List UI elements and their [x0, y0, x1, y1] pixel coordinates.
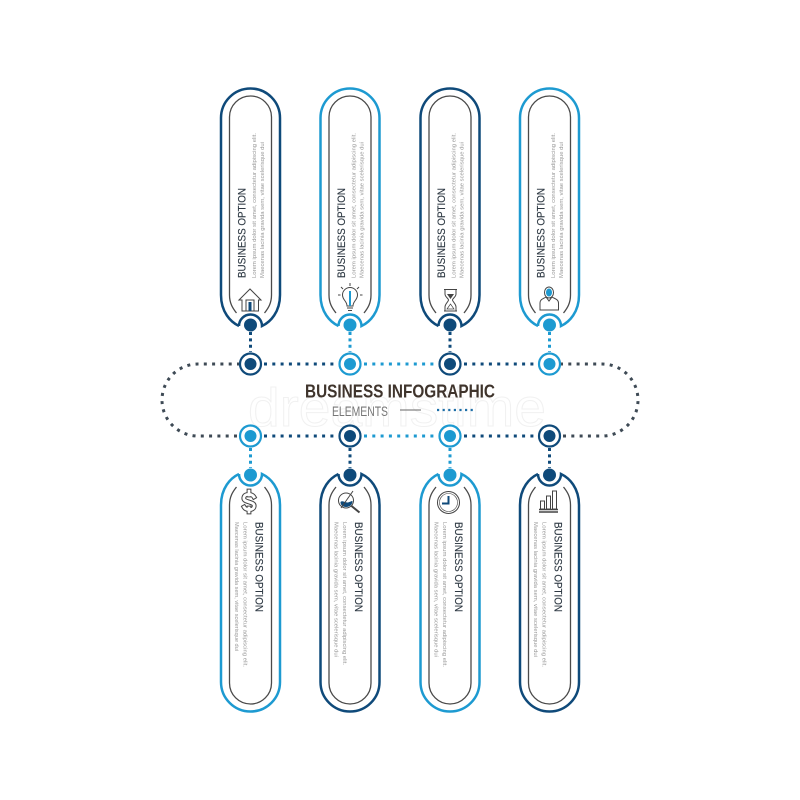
panel: top option 2: Maecenas lacinia gravida sem, vitae scelerisque dui — [360, 142, 366, 278]
panel: bottom option 2 — [320, 426, 380, 712]
dotted stadium connector — [162, 364, 638, 436]
panel: top option 3: BUSINESS OPTION — [436, 188, 448, 278]
panel: bottom option 2: BUSINESS OPTION — [352, 522, 364, 612]
panel: bottom option 3: BUSINESS OPTION — [452, 522, 464, 612]
title: BUSINESS INFOGRAPHIC — [305, 380, 495, 402]
icon: person — [540, 287, 558, 310]
panel: bottom option 1: Maecenas lacinia gravida sem, vitae scelerisque dui — [233, 522, 239, 651]
panel: bottom option 2: Lorem ipsum dolor sit amet, consectetur adipiscing elit. — [341, 522, 347, 665]
panel: top option 1: Maecenas lacinia gravida sem, vitae scelerisque dui — [260, 142, 266, 278]
panel: bottom option 3: Lorem ipsum dolor sit amet, consectetur adipiscing elit. — [441, 522, 447, 667]
subtitle rule — [400, 409, 421, 411]
icon: hourglass — [444, 290, 457, 311]
panel: top option 4 — [520, 88, 579, 374]
panel: bottom option 1: BUSINESS OPTION — [252, 522, 264, 612]
icon: bar chart — [539, 491, 558, 512]
panel: top option 4: BUSINESS OPTION — [536, 188, 548, 278]
panel: bottom option 4: BUSINESS OPTION — [552, 522, 564, 612]
subtitle dotted rule — [437, 409, 476, 411]
panel: top option 2: BUSINESS OPTION — [336, 188, 348, 278]
panel: bottom option 1: Lorem ipsum dolor sit amet, consectetur adipiscing elit. — [242, 522, 248, 667]
panel: bottom option 2: Maecenas lacinia gravida sem, vitae scelerisque dui — [332, 522, 338, 657]
icon: magnifier — [338, 491, 360, 512]
icon: dollar — [244, 491, 254, 512]
panel: top option 2: Lorem ipsum dolor sit amet, consectetur adipiscing elit. — [352, 133, 358, 278]
panel: bottom option 3: Maecenas lacinia gravida sem, vitae scelerisque dui — [432, 522, 438, 657]
panel: top option 2 — [320, 88, 380, 374]
panel: bottom option 4: Maecenas lacinia gravida sem, vitae scelerisque dui — [532, 522, 538, 657]
panel: top option 1 — [221, 88, 280, 374]
panel: top option 4: Lorem ipsum dolor sit amet, consectetur adipiscing elit. — [551, 133, 557, 278]
panel: top option 1: BUSINESS OPTION — [236, 188, 248, 278]
panel: bottom option 3 — [420, 426, 480, 712]
subtitle: ELEMENTS — [332, 404, 388, 419]
panel: bottom option 4: Lorem ipsum dolor sit amet, consectetur adipiscing elit. — [540, 522, 546, 667]
panel: bottom option 1 — [221, 426, 280, 712]
icon: clock — [438, 492, 460, 514]
panel: top option 3: Lorem ipsum dolor sit amet, consectetur adipiscing elit. — [452, 133, 458, 278]
panel: top option 4: Maecenas lacinia gravida sem, vitae scelerisque dui — [559, 142, 565, 278]
panel: top option 3 — [420, 88, 480, 374]
panel: top option 3: Maecenas lacinia gravida sem, vitae scelerisque dui — [460, 142, 466, 278]
icon: light bulb — [338, 283, 362, 310]
panel: top option 1: Lorem ipsum dolor sit amet, consectetur adipiscing elit. — [252, 133, 258, 278]
icon: house — [239, 289, 261, 311]
watermark: dreamstime — [248, 378, 546, 438]
panel: bottom option 4 — [520, 426, 579, 712]
